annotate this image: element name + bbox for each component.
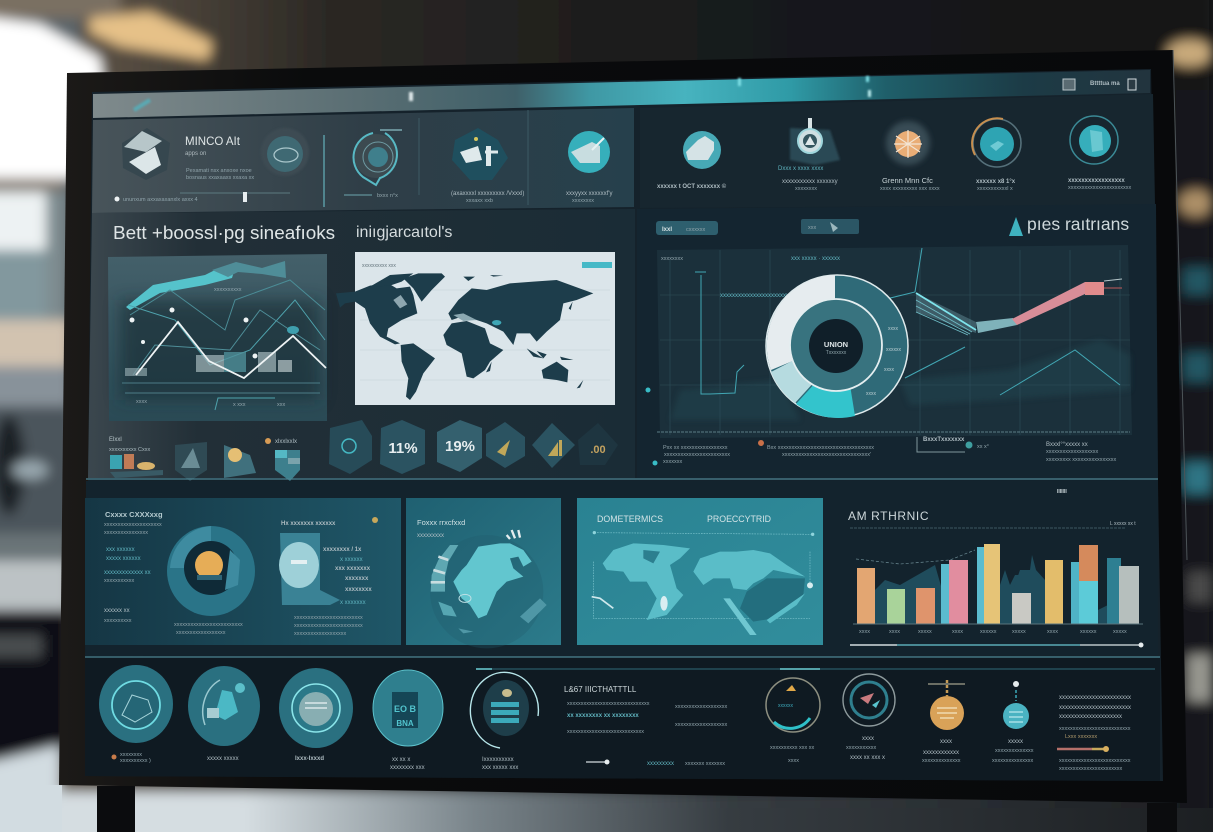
heading: Minco: MINCO AIt xyxy=(185,136,241,148)
caption: xxxxxxxxxxx xyxy=(846,745,876,751)
right text: xxxxxxxx / 1x xyxy=(323,547,362,553)
text block: xxxxxxxxxxxxxxxxxxxxxxx xyxy=(1059,766,1122,772)
bar label: Bttttua ma xyxy=(1090,81,1120,87)
right text: xxxxxxxx xyxy=(345,587,372,593)
card caption: xxxxxxxx xyxy=(572,198,594,204)
dot xyxy=(966,442,972,448)
heading: pies: pıes raıtrıans xyxy=(1027,214,1129,234)
hexagon stat row xyxy=(329,420,618,474)
floor strip xyxy=(60,808,1213,832)
screen xyxy=(85,69,1163,781)
balloon card xyxy=(279,533,340,605)
caption: xxxx xyxy=(862,736,874,742)
text: xxxxxxxxxxxxxxxx xyxy=(104,530,148,536)
hex: 11% xyxy=(380,420,425,474)
hex: 100 xyxy=(578,423,618,465)
axis label: xxx xyxy=(277,402,286,408)
chart label: xxxxxxxxxxxxxxxxxxxxxxxx xxx xyxy=(720,293,803,299)
heading right: PROECCYTRID xyxy=(707,514,771,524)
bar labels: xxxxxx xyxy=(1080,629,1097,635)
panel: top row right xyxy=(640,94,1155,208)
card caption: (axaxxxxl xxxxxxxxx /Vxxxl) xyxy=(451,191,524,197)
panel: top row left xyxy=(92,108,634,213)
panel: main right xyxy=(637,204,1158,478)
icon: gold coin xyxy=(224,445,256,478)
heading: Foxxx rrxcfxxd xyxy=(417,518,465,527)
donut sub label: Txxxxxxx xyxy=(826,350,847,356)
gauge heading: Hx xxxxxxx xxxxxx xyxy=(281,521,336,527)
icon: radar ring xyxy=(344,130,402,199)
map title: xxxxxxxxxx xxx xyxy=(362,263,396,269)
hex: icon clock xyxy=(329,420,372,474)
caption: xxxx xyxy=(940,739,952,745)
caption: xx xx x xyxy=(392,757,410,763)
divider: mid xyxy=(86,478,1158,480)
icon: orange burst xyxy=(886,121,930,165)
line chart xyxy=(108,254,327,421)
slider xyxy=(850,642,1144,648)
slice label: xxxx xyxy=(884,367,894,373)
top label: IIIIIII xyxy=(1057,489,1067,495)
bar labels: xxxx xyxy=(952,629,963,635)
world map stylized xyxy=(592,531,814,635)
text: xxxxxxxxxxxxxxxxxxx xyxy=(675,722,728,728)
note 4 b: xxxxxxxxxxxxxxxxxxx xyxy=(1046,449,1098,455)
bar labels: xxxxx xyxy=(918,629,932,635)
hex: 100: .00 xyxy=(590,444,606,456)
right text: x xxxxxxx xyxy=(340,600,366,606)
text: xxxxxxxxxx xyxy=(104,618,132,624)
note 1: Pxx xx xxxxxxxxxxxxxxxxx xyxy=(663,445,728,451)
accent xyxy=(476,668,820,670)
text block: xxxxxxxxxxxxxxxxxxxxx xyxy=(1059,714,1122,720)
panel: main left xyxy=(88,209,635,481)
card caption: xxxyyxx xxxxxxf'y xyxy=(566,191,612,197)
icon: spike xyxy=(1009,217,1023,236)
caption xyxy=(112,752,151,764)
slice label: xxxxxx xyxy=(886,347,902,353)
caption: xxxxxxxxxxxl x xyxy=(977,186,1013,192)
legend line: ununxum axxaxaxanxlx axxx 4 xyxy=(123,197,198,203)
slice label: xxxx xyxy=(866,391,876,397)
axis xyxy=(853,623,1143,625)
icon: ring globe xyxy=(972,118,1021,167)
heading: L&67 IIICTHATTTLL xyxy=(564,685,637,694)
text block: Pexamati nsx anxoxe nxoe xyxy=(186,168,252,174)
divider lines xyxy=(419,110,528,205)
note 2 b: xxxxxxxxxxxxxxxxxxxxxxxxxxxxxxxx' xyxy=(782,452,871,458)
bezel right highlight xyxy=(1173,50,1187,560)
dashed trend xyxy=(856,550,975,564)
donut chart xyxy=(766,275,908,418)
caption: xxxxxxxxxx xxx xx xyxy=(770,745,815,751)
bars xyxy=(857,544,1139,624)
card: stacked boxes: xxxxxxxxxx Cxxx xyxy=(109,447,150,453)
dot xyxy=(758,440,764,446)
right text: xxxxxxx xyxy=(345,576,369,582)
caption: Grenn Mnn Cfc xyxy=(882,176,933,185)
dashed top line xyxy=(850,527,1125,529)
icon: clipboard xyxy=(1128,79,1136,90)
note 4 c: xxxxxxxxx xxxxxxxxxxxxxxxx xyxy=(1046,457,1117,463)
text: xxxxxxxxxxxxxxxxxxxxxxxxxxxxxx xyxy=(567,701,650,707)
world map land xyxy=(336,273,593,400)
bar labels: xxxxxx xyxy=(980,629,997,635)
row three backdrop xyxy=(85,480,1158,656)
icon: teal leaf circle xyxy=(568,131,610,173)
note 1 c: xxxxxxx xyxy=(663,459,682,465)
caption: xxxx xxxxxxxxx xxx xxxx xyxy=(880,186,940,192)
floor left xyxy=(0,785,62,832)
top title bar xyxy=(93,70,1150,118)
circle icon 4 xyxy=(373,670,443,746)
text: xxxxxxxxxxxxx xx xyxy=(104,570,151,576)
caption: Dxxx x xxxx xxxx xyxy=(778,166,823,172)
tag: left xyxy=(656,221,718,235)
text: xxxxxxxxxxxxxxxxxxxxx xyxy=(104,522,162,528)
text block: xxxxxxxxxxxxxxxxxxxxxxxxxx xyxy=(1059,758,1131,764)
panel: map xyxy=(577,498,823,645)
note 3: BxxxTxxxxxxx xyxy=(923,437,965,443)
note 3 bracket xyxy=(917,437,965,452)
donut gauge xyxy=(167,526,255,616)
ring gauge 1: xxxxxx xyxy=(778,703,794,709)
card: stacked boxes: Elxxl xyxy=(109,437,122,443)
foot text: xxxxxxxxxxxxxxxxxxxxxxxxx xyxy=(294,615,363,621)
text block: bosnaus xxaxaaxs xxaxa xx xyxy=(186,175,254,181)
tag: left: cxxxxxx xyxy=(686,227,706,233)
hex: bars xyxy=(532,423,575,468)
axis label: xxxx xyxy=(136,399,147,405)
text: xxxxxxxxxxxxxxxxxxx xyxy=(675,704,728,710)
rule xyxy=(476,668,1155,670)
card: label and chart xyxy=(265,438,300,481)
city backdrop xyxy=(875,555,1108,624)
icon: ring globe 2 xyxy=(1070,116,1118,164)
icon: hex shard xyxy=(175,442,207,481)
ring gauge 2 xyxy=(843,674,895,726)
icon: hex person xyxy=(452,128,508,180)
line: left spike xyxy=(695,248,1120,395)
hex: 19% xyxy=(437,420,482,472)
map tag xyxy=(582,262,612,268)
tag: center: xxx xyxy=(808,225,816,231)
chart label: xxx xxxxx · xxxxxx xyxy=(791,256,840,262)
panel: bar chart xyxy=(848,489,1144,648)
hex: 11%: 11% xyxy=(388,440,418,457)
gold badge xyxy=(928,680,965,730)
sub heading: xxxxxxxxx xyxy=(417,533,444,539)
note 1 b: xxxxxxxxxxxxxxxxxxxxxxxx xyxy=(664,452,730,458)
text: xxxxxxxxx xyxy=(647,761,674,767)
icon: teal cloud circle xyxy=(683,131,721,169)
caption: Ixxxxxxxxxx xyxy=(482,757,514,763)
caption: xxxxxxxxxx ) xyxy=(120,758,151,764)
heading: AM RTHRNIC xyxy=(848,509,929,523)
icon: crystal hexagon xyxy=(122,128,170,180)
caption: xxxxxxxx xyxy=(795,186,817,192)
chart backdrop xyxy=(657,245,1132,438)
tag: left: Ixxl xyxy=(662,227,672,233)
caption: xxxxxxxxxxxx xyxy=(923,750,959,756)
caption: xxxx xx xxx x xyxy=(850,755,885,761)
footer notes xyxy=(652,437,1117,466)
bar labels xyxy=(859,629,1127,635)
icon row: small charts xyxy=(109,437,300,481)
slice label: xxxx xyxy=(888,326,898,332)
note 3 b: xx x° xyxy=(977,444,989,450)
slider xyxy=(586,760,610,764)
caption: xxxx xyxy=(788,758,799,764)
bar labels: xxxx xyxy=(889,629,900,635)
caption: lxxx-Ixxxd xyxy=(295,756,324,762)
ring gauge 1 xyxy=(766,678,820,732)
foot text: xxxxxxxxxxxxxxxxxxx xyxy=(294,631,346,637)
teal badge xyxy=(1003,681,1029,729)
foot text: xxxxxxxxxxxxxxxxxxxxxxxxx xyxy=(174,622,243,628)
heading: Cxxxx CXXXxxg xyxy=(105,510,163,519)
caption: xxxxxxxxxxxxxx xyxy=(922,758,961,764)
monitor stand legs xyxy=(97,786,1177,832)
caption: xxxxxxxxxxx xxxxxxy xyxy=(782,179,838,185)
top label: L xxxxx xx t xyxy=(1110,521,1136,527)
circle icon 2 xyxy=(188,666,260,746)
ribbon chart xyxy=(916,279,1122,335)
caption: xxxxxxxxxxxxxx xyxy=(995,748,1034,754)
caption: xxxxxx x8 1°x xyxy=(976,179,1016,185)
text: xx xxxxxxxx xx xxxxxxxx xyxy=(567,713,639,719)
chart label: xxxxxxxx xyxy=(661,256,683,262)
caption: xxxxxxxxxxxxxxxxx xyxy=(1068,178,1125,184)
right text: x xxxxxx xyxy=(340,557,363,563)
icon: radar ring: bxxx n°x xyxy=(377,193,398,199)
heading 2: iniıgjarcaıtol's xyxy=(356,224,452,241)
circle icon 3 xyxy=(279,668,353,748)
caption: xxxxxxxx xyxy=(120,752,142,758)
donut label: UNION xyxy=(824,340,848,349)
circle icon 1 xyxy=(99,665,173,743)
world map card xyxy=(336,252,615,405)
foot text: xxxxxxxxxxxxxxxxxx xyxy=(176,630,226,636)
note 2: Bxx xxxxxxxxxxxxxxxxxxxxxxxxxxxxxxxxxxx xyxy=(767,445,874,451)
hex: 19%: 19% xyxy=(445,438,475,455)
dot xyxy=(652,460,658,466)
circle icon 4: BNA xyxy=(396,719,414,728)
bottom row xyxy=(85,656,1160,781)
card: label and chart: xlxxlxxlx xyxy=(275,439,297,445)
axis label: x xxx xyxy=(233,402,246,408)
text: xxxxxxx xxxxxxx xyxy=(685,761,725,767)
chart label: xxxxxxxxxx xyxy=(214,287,242,293)
text: xxxxxxxxxxx xyxy=(104,578,134,584)
bar labels: xxxx xyxy=(1047,629,1058,635)
legend line xyxy=(114,192,290,203)
icon: gear ring xyxy=(790,118,840,165)
slider xyxy=(1057,746,1109,752)
bar labels: xxxx xyxy=(859,629,870,635)
icon: bar glyphs xyxy=(134,76,871,110)
right text: xxx xxxxxxx xyxy=(335,566,371,572)
text: xxxxxxxxxxxxxxxxxxxxxxxxxxxx xyxy=(567,729,644,735)
tag: center xyxy=(801,219,859,234)
bar labels: xxxxx xyxy=(1113,629,1127,635)
heading: Bett +boossl·pg sineafıoks xyxy=(113,223,335,244)
circle icon 5 xyxy=(470,672,538,748)
caption: xxxxxxxxxxxxxxxxxxxxxxx xyxy=(1068,185,1132,191)
foot text: xxxxxxxxxxxxxxxxxxxxxxxxx xyxy=(294,623,363,629)
connector line xyxy=(323,135,325,207)
globe graphic xyxy=(430,530,547,648)
card: stacked boxes xyxy=(109,437,163,478)
icon: folder xyxy=(1063,79,1075,90)
dot xyxy=(372,517,378,523)
panel: top row cards xyxy=(451,128,612,204)
bar labels: xxxxx xyxy=(1012,629,1026,635)
top rule xyxy=(85,656,1160,658)
circle icon 4: EO B xyxy=(394,704,416,714)
text: xxxxxx xx xyxy=(104,608,130,614)
caption: xxxxxxxxxxxxxxx xyxy=(992,758,1034,764)
caption: xxxxxxxx xxx xyxy=(390,765,425,771)
note 4: Bxxxl°°xxxxx xx xyxy=(1046,442,1088,448)
text block: xxxxxxxxxxxxxxxxxxxxxxxx xyxy=(1059,705,1131,711)
icon: circle gauge xyxy=(261,128,309,176)
hex: leaf xyxy=(486,422,525,468)
panel: globe xyxy=(406,498,561,648)
text block: xxxxxxxxxxxxxxxxxxxxxxxx xyxy=(1059,695,1131,701)
caption: xxx xxxxx xxx xyxy=(482,765,518,771)
heading left: DOMETERMICS xyxy=(597,514,663,524)
caption: xxxxxx t OCT xxxxxxx © xyxy=(657,183,727,190)
text block: xxxxxxxxxxxxxxxxxxxxxxxxxx xyxy=(1059,726,1131,732)
caption: xxxxx xyxy=(1008,739,1023,745)
text: xxxxx xxxxxx xyxy=(106,556,141,562)
caption: xxxxx xxxxx xyxy=(207,756,239,762)
text: xxx xxxxxx xyxy=(106,547,135,553)
card caption: xxxaxx xxb xyxy=(466,198,493,204)
panel: donut info xyxy=(85,498,401,645)
sub label: apps on xyxy=(185,151,206,157)
text block: Lxxx xxxxxxx xyxy=(1065,734,1097,740)
